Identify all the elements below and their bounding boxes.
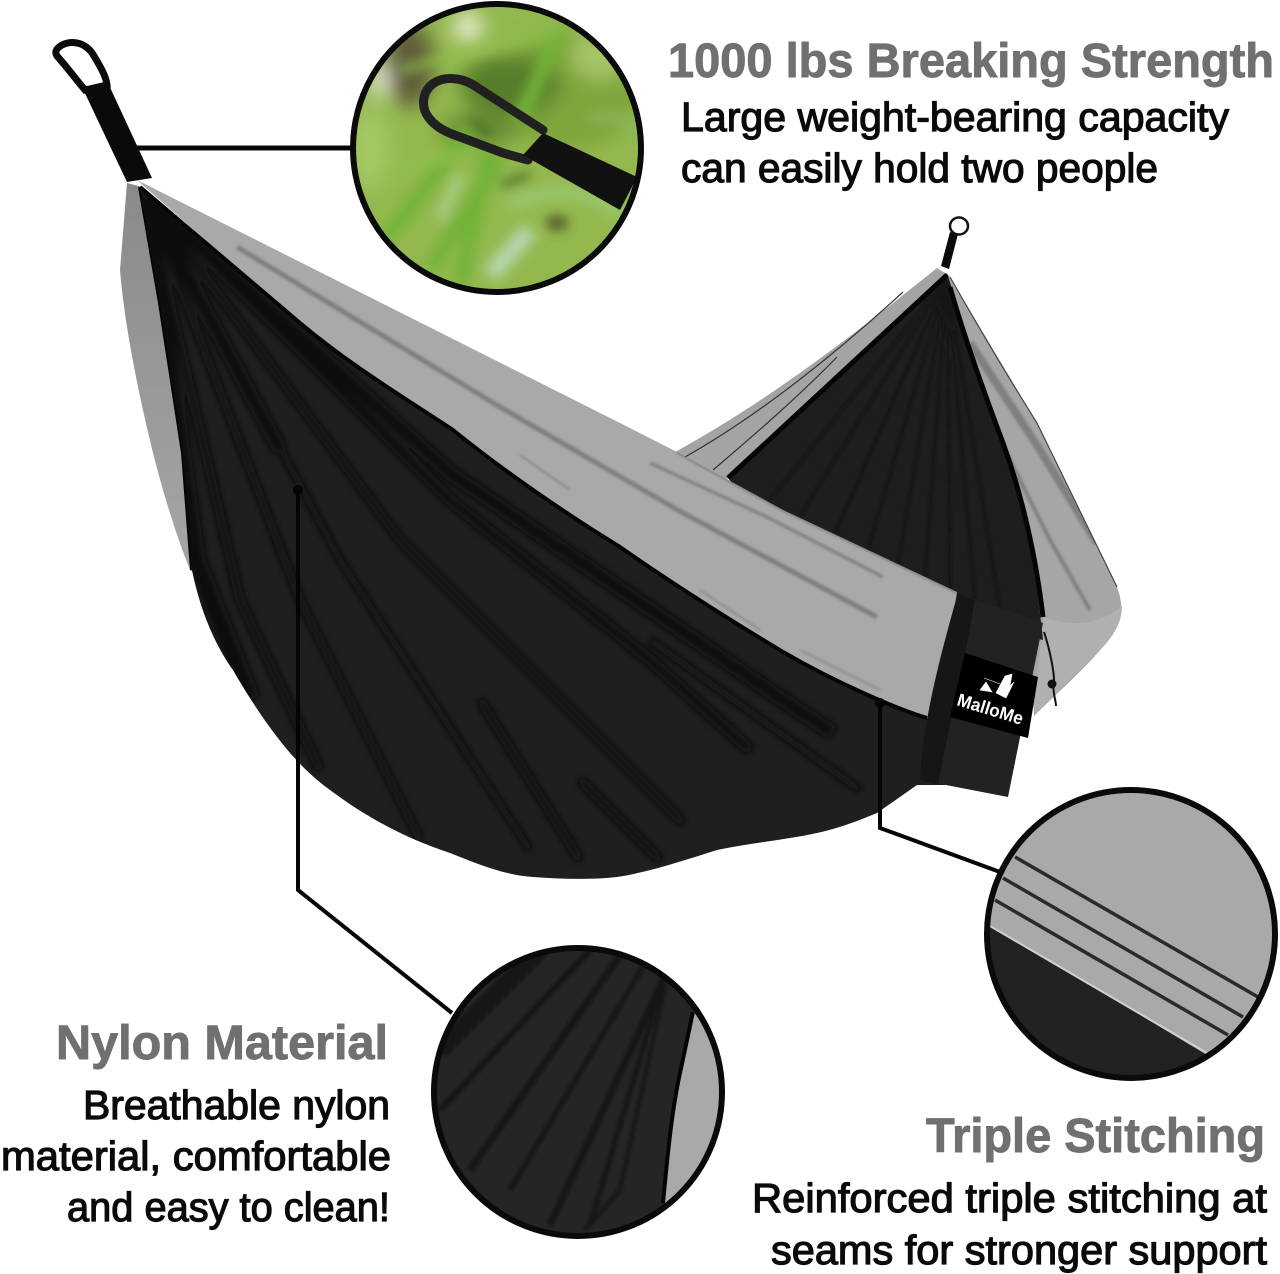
hanging strap right xyxy=(941,218,968,269)
description: material, comfortable xyxy=(1,1133,391,1179)
gray fabric edge xyxy=(665,1012,719,1202)
stitch lines xyxy=(995,857,1258,1035)
webbing strap xyxy=(523,133,637,210)
description xyxy=(681,94,1229,191)
back gray side right xyxy=(945,275,1122,716)
hammock illustration xyxy=(56,43,1122,879)
description: can easily hold two people xyxy=(681,145,1158,191)
logo figure xyxy=(980,674,1014,698)
pouch label xyxy=(950,653,1038,738)
drawstring xyxy=(1044,632,1056,706)
cord lock xyxy=(1048,680,1056,688)
front black body xyxy=(140,187,945,879)
description: seams for stronger support xyxy=(771,1227,1268,1273)
heading: Triple Stitching xyxy=(926,1110,1265,1163)
description: Reinforced triple stitching at xyxy=(752,1175,1268,1221)
leader line: nylon material xyxy=(295,487,452,1013)
storage pouch xyxy=(920,593,1056,797)
front gray band xyxy=(137,180,957,718)
logo text: MalloMe xyxy=(955,690,1026,729)
description: and easy to clean! xyxy=(67,1184,390,1230)
heading: Nylon Material xyxy=(56,1017,388,1070)
text block: triple stitching xyxy=(752,1110,1268,1273)
back gray wing left xyxy=(675,268,950,500)
dark fabric xyxy=(990,925,1206,1075)
description xyxy=(752,1175,1268,1273)
description xyxy=(1,1082,391,1230)
text block: nylon material xyxy=(1,1017,391,1230)
text block: breaking strength xyxy=(668,35,1274,191)
description: Breathable nylon xyxy=(83,1082,390,1128)
heading: 1000 lbs Breaking Strength xyxy=(668,35,1274,88)
description: Large weight-bearing capacity xyxy=(681,94,1229,140)
detail circle: nylon fabric xyxy=(432,946,730,1238)
hanging strap left xyxy=(56,43,152,182)
back black panel xyxy=(728,273,1043,640)
front gray left side xyxy=(120,183,196,575)
detail circle: carabiner on green background xyxy=(350,0,645,296)
detail circle: triple stitching xyxy=(985,788,1280,1090)
leader line: carabiner xyxy=(135,146,352,150)
carabiner xyxy=(424,79,543,160)
leader line: triple stitching xyxy=(877,700,1000,872)
